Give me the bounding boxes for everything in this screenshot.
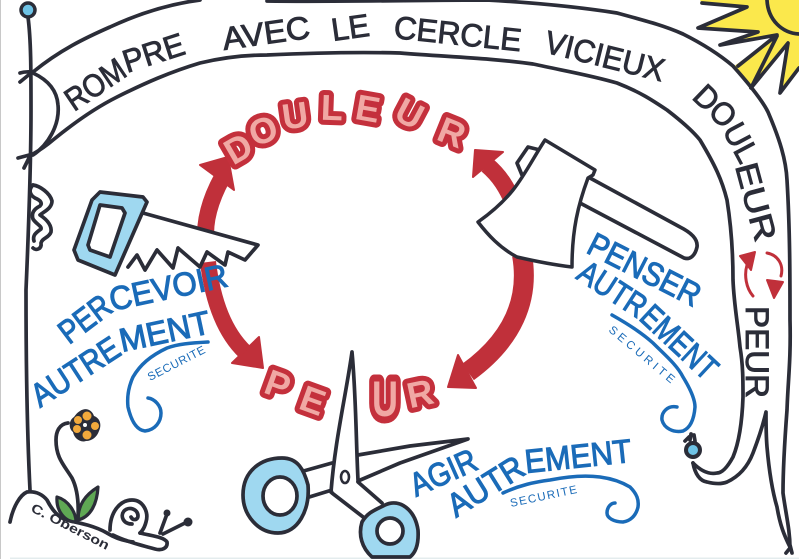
arrow: peur to douleur	[200, 157, 234, 240]
knot	[685, 434, 700, 457]
word: PEUR: P	[260, 361, 296, 408]
text block: percevoir autrement: MENT	[116, 304, 213, 359]
icon: axe	[478, 140, 697, 267]
AUTREMENT: AUTR	[571, 253, 654, 325]
text block: percevoir autrement	[24, 257, 231, 431]
PEUR: PEUR	[739, 306, 775, 398]
word: DOULEUR: E	[353, 86, 383, 131]
VICIEUX: VICIEUX	[541, 24, 668, 88]
banner fold	[33, 73, 58, 155]
signature: C. Oberson	[29, 500, 112, 553]
banner title: EUR	[728, 158, 784, 245]
LE: LE	[329, 7, 372, 48]
word: DOULEUR: O	[243, 106, 283, 155]
text block: penser autrement	[571, 225, 726, 431]
icon: small cycle arrows	[740, 252, 783, 298]
illustration: hill, flower and snail	[10, 409, 192, 553]
icon: scissors	[243, 352, 468, 557]
text block: percevoir autrement: CEVOIR	[106, 257, 231, 318]
squiggle	[30, 185, 52, 249]
pole ball	[21, 3, 35, 17]
flower	[70, 409, 100, 441]
saw blade	[118, 213, 258, 270]
main blade	[331, 352, 358, 492]
SECURITE: SECURITE	[606, 324, 677, 386]
left ring	[243, 458, 308, 533]
text block: agir autrement	[404, 432, 638, 524]
PENSER: PENSER	[582, 225, 707, 314]
icon: saw	[74, 192, 258, 275]
ROMPRE: ROM	[58, 51, 133, 118]
AGIR: AGIR	[404, 441, 483, 503]
red cycle arrows	[200, 150, 524, 388]
word: DOULEUR	[217, 86, 472, 173]
axe handle	[580, 178, 697, 259]
banner title	[58, 7, 784, 398]
swirl	[612, 315, 695, 431]
leaves	[57, 497, 76, 522]
word: DOULEUR: L	[320, 87, 344, 128]
word: PEUR: R	[403, 371, 437, 416]
pole	[26, 17, 31, 490]
word: PEUR: U	[372, 371, 398, 428]
hill	[10, 492, 133, 542]
PERCEVOIR: PER	[51, 287, 119, 351]
upper-right blade	[358, 439, 468, 481]
lower ring	[360, 503, 418, 557]
AVEC: AVEC	[220, 9, 312, 57]
stem	[56, 423, 78, 518]
word: PEUR: E	[295, 377, 331, 424]
pivot	[341, 471, 349, 483]
swirl	[128, 342, 208, 431]
saw handle	[74, 192, 147, 275]
DOULEUR: DO	[686, 77, 744, 135]
text block: penser autrement: EMENT	[633, 297, 726, 387]
word: DOULEUR: D	[217, 124, 260, 173]
icon: sun	[698, 0, 799, 93]
SECURITE: SECURITE	[146, 344, 208, 384]
arrow: douleur to peur	[208, 262, 263, 368]
AUTREMENT: AUTRE	[24, 329, 127, 414]
word: DOULEUR: R	[432, 109, 472, 156]
axe back	[517, 147, 540, 175]
CERCLE: CERCLE	[392, 9, 523, 58]
left ring connectors	[300, 463, 332, 498]
swirl	[503, 476, 638, 522]
axe blade	[478, 140, 595, 267]
arrow: to peur from right	[448, 255, 524, 388]
banner title: UL	[716, 116, 766, 169]
word: DOULEUR: U	[389, 89, 431, 138]
text block: agir autrement: EMENT	[523, 432, 633, 480]
snail	[110, 500, 192, 550]
AUTREMENT: AUTR	[440, 448, 531, 524]
word: DOULEUR: U	[279, 93, 311, 138]
banner title: PRE	[118, 26, 189, 80]
word: PEUR	[260, 361, 437, 428]
SECURITE: SECURITE	[509, 484, 578, 510]
arrow: douleur via axe	[473, 150, 514, 204]
lower arm	[332, 482, 382, 520]
